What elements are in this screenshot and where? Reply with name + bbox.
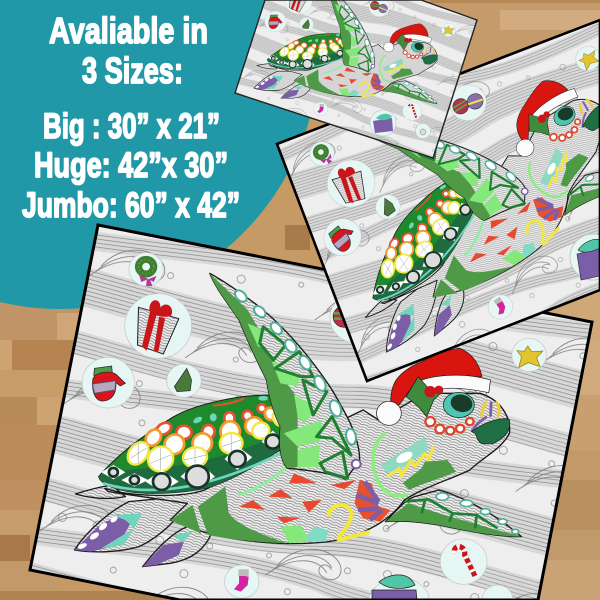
wave background (30, 225, 592, 600)
santa hat (377, 348, 491, 425)
right flipper (385, 490, 521, 537)
panel: small poster (235, 0, 477, 158)
size list: Huge: 42”x 30” (34, 146, 228, 185)
panel: medium poster (272, 0, 600, 381)
body (105, 393, 510, 544)
bubble: gift (125, 294, 192, 358)
bubble: mitten (82, 357, 134, 408)
heading: Avaliable in 3 Sizes: 3 Sizes: (82, 50, 183, 91)
bubble: sock (225, 565, 259, 598)
shell (99, 395, 284, 493)
necklace (425, 417, 474, 435)
tail (75, 485, 125, 498)
teal circle backdrop (0, 0, 319, 309)
bubble: wreath (129, 253, 163, 286)
back flipper left (74, 498, 187, 552)
size list: Jumbo: 60” x 42” (22, 186, 240, 225)
bubble: star (512, 338, 546, 372)
panel: large poster (30, 225, 592, 600)
bubble: small ornament (482, 585, 513, 600)
heading: Avaliable in 3 Sizes (49, 10, 208, 91)
belly markings (170, 462, 391, 543)
bubble: ornaments (330, 293, 381, 343)
turtle (74, 273, 521, 567)
heading: Avaliable in 3 Sizes: Avaliable in (49, 10, 208, 51)
size list: Big : 30” x 21” (43, 107, 220, 146)
neck markings (373, 433, 456, 496)
top flipper (210, 273, 361, 479)
back flipper right (143, 527, 212, 567)
bubble: purple gift (368, 575, 429, 600)
eye (443, 392, 475, 418)
bubble: candy cane (440, 539, 487, 584)
size list (22, 107, 240, 225)
beak (472, 402, 510, 444)
bubble: tree (167, 364, 201, 397)
